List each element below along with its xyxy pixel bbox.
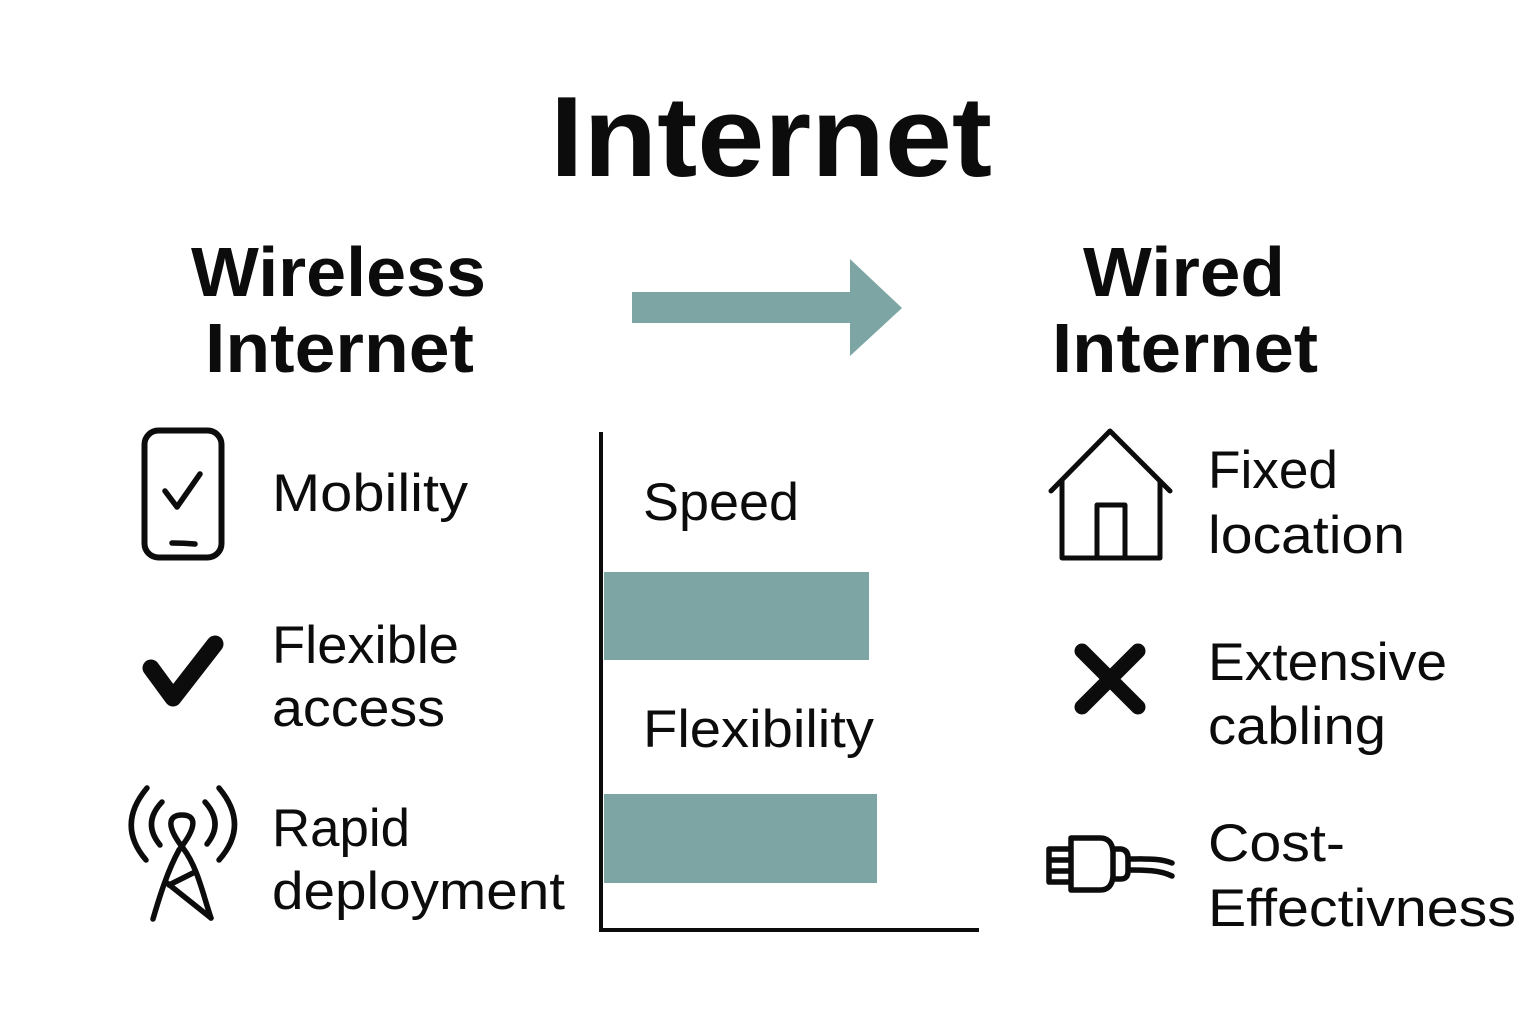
text: flexible access: Flexible	[272, 616, 459, 675]
arrow: wireless to wired	[632, 259, 902, 356]
icon: check mark	[151, 644, 215, 698]
icon: x mark	[1082, 651, 1138, 707]
text: extensive cabling: cabling	[1208, 697, 1386, 756]
text: flexible access	[272, 616, 459, 738]
label: speed: Speed	[643, 473, 799, 532]
chart: speed and flexibility bars	[601, 432, 979, 930]
icon: phone with check	[144, 430, 222, 558]
panel: wired features	[1049, 431, 1516, 938]
title: Internet	[550, 74, 992, 201]
text: fixed location	[1208, 441, 1405, 565]
text: cost-effectivness	[1208, 814, 1516, 938]
heading: wireless internet: Internet	[205, 309, 474, 387]
panel: wireless features	[131, 430, 565, 921]
heading: wireless internet: Wireless	[191, 233, 486, 311]
heading: wired internet: Wired	[1083, 233, 1285, 311]
icon: radio tower	[131, 788, 234, 919]
text: fixed location: location	[1208, 506, 1405, 565]
label: flexibility: Flexibility	[643, 700, 875, 759]
text: fixed location: Fixed	[1208, 441, 1338, 500]
heading: wireless internet	[191, 233, 486, 387]
text: extensive cabling: Extensive	[1208, 633, 1447, 692]
text: cost-effectivness: Effectivness	[1208, 879, 1516, 938]
heading: wired internet	[1052, 233, 1318, 387]
text: flexible access: access	[272, 679, 445, 738]
text: mobility: Mobility	[272, 464, 469, 523]
heading: wired internet: Internet	[1052, 309, 1318, 387]
bar: speed	[604, 572, 869, 660]
icon: house	[1051, 431, 1170, 558]
text: extensive cabling	[1208, 633, 1447, 756]
text: rapid deployment: Rapid	[272, 799, 410, 858]
text: cost-effectivness: Cost-	[1208, 814, 1345, 873]
text: rapid deployment	[272, 799, 565, 921]
chart axes	[601, 432, 979, 930]
text: rapid deployment: deployment	[272, 862, 565, 921]
bar: flexibility	[604, 794, 877, 883]
icon: ethernet plug	[1049, 838, 1172, 890]
